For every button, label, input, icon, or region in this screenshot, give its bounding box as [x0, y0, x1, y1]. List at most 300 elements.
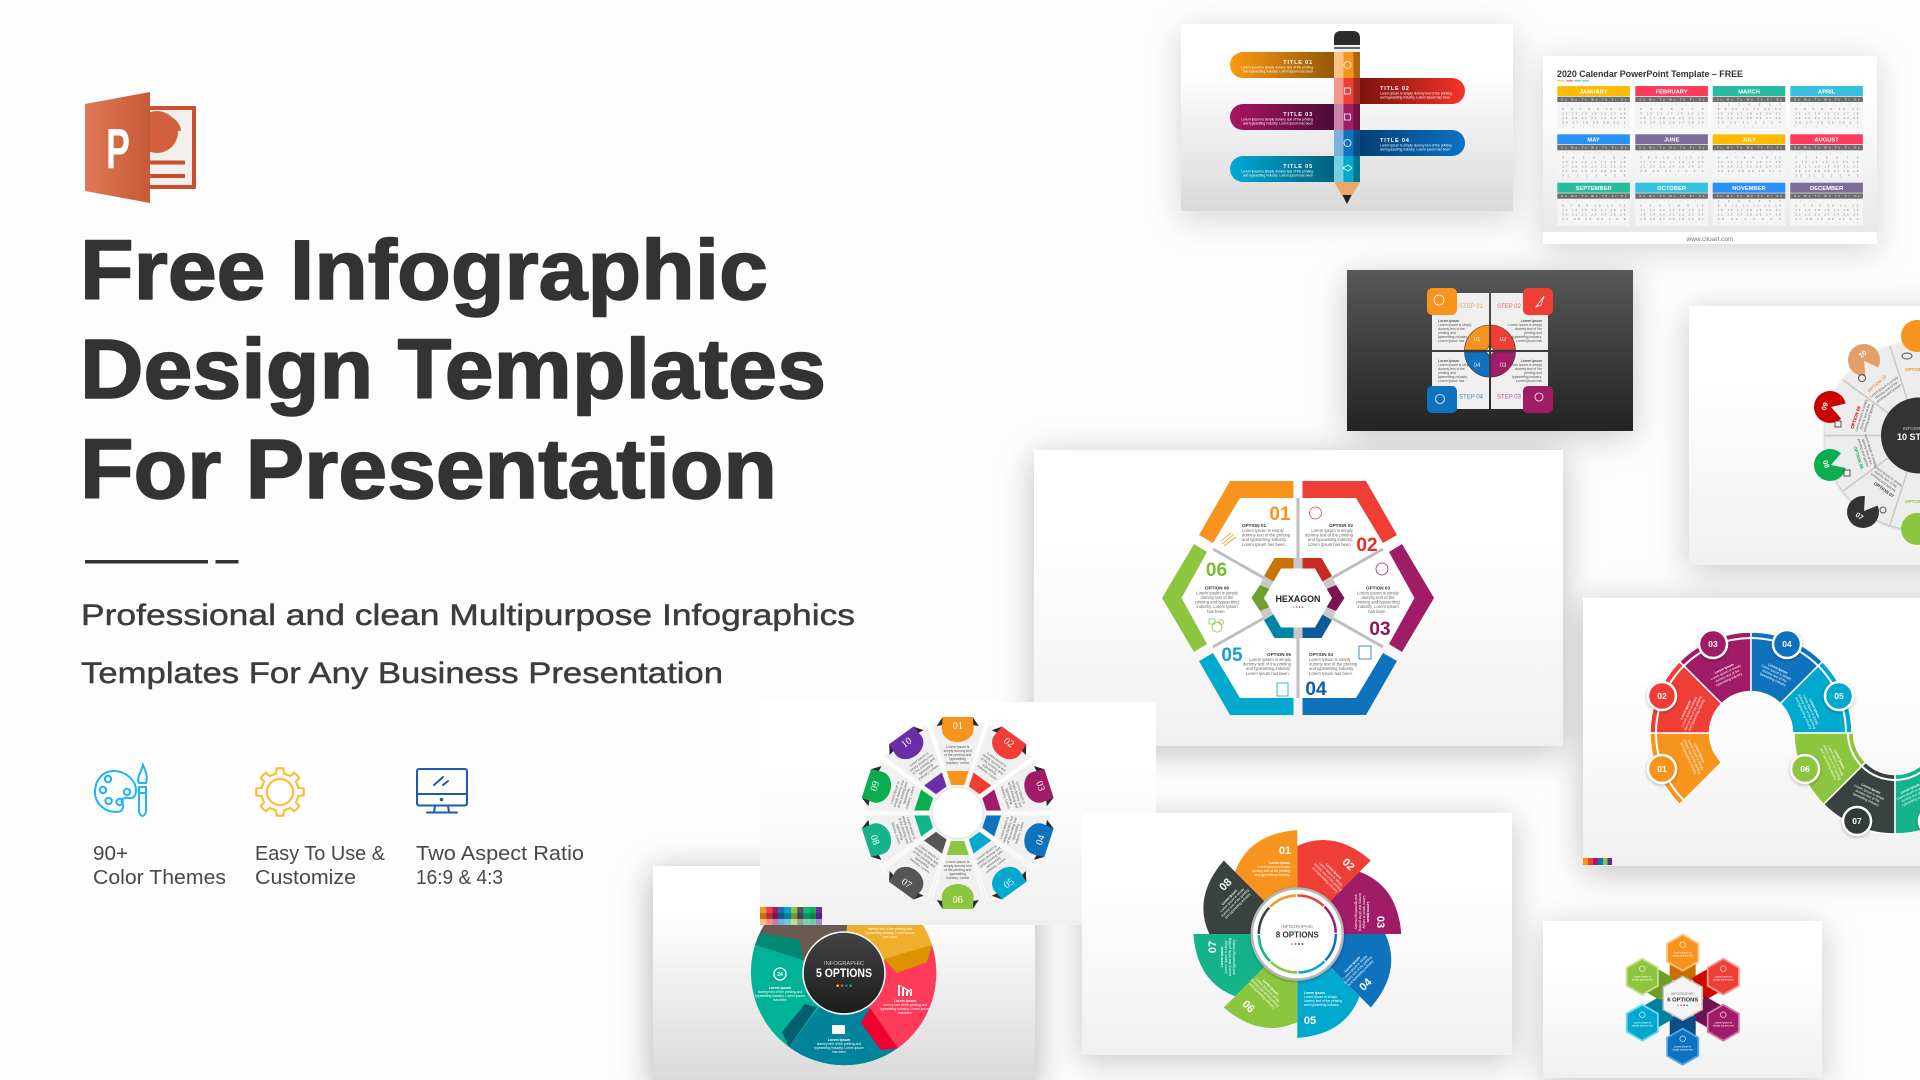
sector: brown [755, 880, 850, 973]
badge numbers: 02 [1657, 691, 1667, 701]
petal text: Lorem Ipsum is simply [1255, 977, 1281, 1003]
step text: printing and [1438, 331, 1456, 335]
month: May [1557, 134, 1630, 177]
badge numbers: 03 [1708, 639, 1718, 649]
subtitle: Professional and clean Multipurpose Infographics [81, 599, 855, 632]
label: easy to use and customize: Easy To Use & [255, 843, 386, 865]
title: Design Templates [80, 322, 826, 416]
sector text: simply dummy text [1010, 780, 1023, 808]
month: January: 5 6 7 8 9 10 11 [1562, 107, 1626, 111]
step labels [1459, 304, 1522, 400]
sector text: Lorem Ipsum is [946, 745, 970, 749]
option 03: Lorem Ipsum is simply [1357, 590, 1400, 596]
month: February: 9 10 11 12 13 14 15 [1640, 112, 1704, 116]
month: October: 1 2 3 4 5 6 7 [1640, 222, 1704, 226]
outer tabs [861, 717, 1054, 909]
wheel hub [932, 788, 983, 838]
pill: title 05: TITLE 05 [1283, 164, 1313, 170]
petals [1179, 816, 1416, 1052]
month: October: 18 19 20 21 22 23 24 [1640, 213, 1704, 217]
sector description lines: Lorem Ipsum is simply [1873, 464, 1903, 488]
petal text: Lorem Ipsum [1304, 991, 1325, 995]
month: July: 2 3 4 5 6 7 8 [1718, 173, 1781, 177]
month: January: 2 3 4 5 6 7 8 [1562, 125, 1626, 129]
petal text: dummy text of the printing [1252, 869, 1290, 873]
sector: pink [844, 945, 936, 1048]
label: 90+ color themes [93, 843, 226, 889]
badge numbers [1657, 639, 1862, 826]
wave inner rings [1656, 638, 1920, 800]
step tab 09: 09 [1821, 402, 1830, 411]
option 02: and typesetting industry. [1308, 537, 1353, 542]
sector text: pink: has been [898, 1011, 912, 1015]
sector text: typesetting [1005, 788, 1014, 805]
sector description lines: printing and typeset [1876, 383, 1902, 404]
sector: blue teal [789, 973, 898, 1065]
option labels: OPTION 09 [1850, 405, 1862, 429]
wave segment text: and typesetting industry [1679, 741, 1698, 775]
sector description lines: Lorem Ipsum is simply [1864, 434, 1878, 467]
option 03: OPTION 03 [1366, 586, 1390, 590]
sector text: Lorem Ipsum is [946, 860, 970, 864]
label: easy to use and customize [255, 843, 386, 889]
step text: Lorem Ipsum [1521, 319, 1542, 323]
sector text: teal: 24 [777, 972, 783, 978]
sector text: yellow: typesetting industry. Lorem Ipsum [865, 931, 915, 935]
step tab 07 [1847, 490, 1884, 528]
petal numbers: 06 [1240, 998, 1257, 1015]
pill: title 02: and typesetting industry. Lorem Ipsum has been [1380, 96, 1450, 100]
wave segment text: dummy text of the printing [1683, 695, 1703, 731]
petal numbers: 02 [1340, 856, 1357, 873]
step text: dummy text of the [1515, 327, 1542, 331]
option 02: OPTION 02 [1329, 523, 1353, 528]
step labels: STEP 04 [1459, 394, 1484, 400]
option 04: OPTION 04 [1309, 652, 1333, 657]
step labels: STEP 03 [1497, 394, 1522, 400]
month: February: 1 2 3 4 5 6 7 [1640, 125, 1704, 129]
panel: 6 options hexagons [1543, 921, 1822, 1078]
wheel base [1825, 342, 1920, 530]
hexagon: lower left cyan: Lorem Ipsum is [1634, 1022, 1652, 1025]
pill: title 04: Lorem Ipsum is simply dummy text of the printing [1380, 144, 1452, 148]
step text: Lorem Ipsum is simply [1438, 323, 1472, 327]
petal text: and typesetting industry. [1224, 892, 1252, 920]
step text: printing and [1438, 371, 1456, 375]
badge numbers: 04 [1782, 639, 1792, 649]
pill: title 03 [1230, 104, 1334, 130]
sector text: typesetting [895, 823, 904, 840]
icon: PowerPoint logo [85, 92, 196, 203]
icon: PowerPoint logo: P [106, 117, 130, 181]
month: March: 15 16 17 18 19 20 21 [1718, 112, 1781, 116]
month: June: 7 8 9 10 11 12 13 [1640, 155, 1704, 159]
hexagon: upper left green: simply dummy text [1632, 979, 1653, 982]
month: November: NOVEMBER [1732, 186, 1767, 192]
month: October: Su Mo Tu We Th Fr Sa [1639, 194, 1705, 198]
label: easy to use and customize: Customize [255, 867, 356, 889]
tab numbers: 01 [953, 721, 963, 732]
hexagon ring joints [1260, 558, 1336, 638]
month: September: 20 21 22 23 24 25 26 [1562, 213, 1626, 217]
sector text: typesetting [1011, 823, 1020, 840]
option 06: industry. Lorem Ipsum [1196, 604, 1238, 609]
panel: 2020 calendar [1543, 56, 1877, 244]
month: February: 23 24 25 26 27 28 29 [1640, 120, 1704, 124]
sector text: industry. Lorem [905, 786, 916, 809]
month: July [1713, 134, 1785, 177]
month: January: JANUARY [1580, 89, 1608, 95]
sector text: pink: dummy text of the printing and [883, 1003, 927, 1007]
sector text: blue teal: Lorem Ipsum [828, 1038, 850, 1042]
month: August: 9 10 11 12 13 14 15 [1795, 160, 1859, 164]
panel: 8 options circle [1082, 813, 1512, 1055]
step text: typesetting industry. [1512, 375, 1542, 379]
option 05: dummy text of the printing [1243, 662, 1292, 667]
wave segment text: Lorem Ipsum [1679, 700, 1692, 720]
month: November: Su Mo Tu We Th Fr Sa [1717, 194, 1782, 198]
month: October: OCTOBER [1657, 186, 1687, 192]
month: March: MARCH [1738, 89, 1760, 95]
month: November: 15 16 17 18 19 20 21 [1718, 208, 1781, 212]
wave segment text: Lorem Ipsum is simply [1802, 694, 1820, 726]
pill: title 03: and typesetting industry. Lorem Ipsum has been [1243, 122, 1313, 126]
month: August: 30 31 1 2 3 4 5 [1795, 173, 1859, 177]
month: September [1557, 183, 1630, 226]
panel: semicircle wave steps [1583, 598, 1920, 866]
icon: monitor [417, 769, 467, 812]
option 02: dummy text of the printing [1305, 533, 1354, 538]
month: April: 5 6 7 8 9 10 11 [1795, 107, 1859, 111]
leaf numbers: 02 [1500, 337, 1507, 343]
option 05: Lorem Ipsum has been . [1246, 671, 1291, 676]
option 05: and typesetting industry. [1246, 666, 1291, 671]
sector text: simply dummy text [976, 846, 1001, 866]
panel: 10 steps wheel [1689, 306, 1920, 565]
tab numbers: 06 [953, 895, 963, 906]
month: August [1790, 134, 1863, 177]
wave segment text: Lorem Ipsum [1714, 662, 1734, 675]
panel: hexagon [1034, 450, 1563, 746]
panel: four steps dark [1347, 270, 1633, 431]
option 01: Lorem Ipsum is simply [1242, 528, 1285, 533]
feature: color themes [93, 765, 226, 889]
hexagon: top orange [1667, 935, 1698, 971]
sector text: pink [880, 984, 930, 1015]
wave segment text: and typesetting industry [1819, 747, 1838, 781]
hexagon outer segments [1162, 481, 1434, 715]
month: May: 31 1 2 3 4 5 6 [1562, 173, 1626, 177]
month: June: 5 6 7 8 9 10 11 [1640, 173, 1704, 177]
option 04: Lorem Ipsum is simply [1309, 657, 1352, 662]
center color ring [1243, 880, 1352, 988]
hexagon white interior [1182, 498, 1414, 698]
icon: gear [256, 768, 304, 816]
sector text: simply dummy text [909, 753, 934, 773]
wave segment text: typesetting industry [1852, 792, 1880, 807]
sector text: industry. Lorem [946, 761, 969, 765]
option 01: Lorem Ipsum has been . [1242, 542, 1287, 547]
sector text: yellow: dummy text of the printing and [868, 927, 912, 931]
option labels [1850, 367, 1920, 504]
option labels: OPTION 07 [1873, 481, 1895, 499]
month: April: 3 4 5 6 7 8 9 [1795, 125, 1859, 129]
month: February: Su Mo Tu We Th Fr Sa [1639, 97, 1705, 101]
petal text: dummy text of the printing [1358, 893, 1362, 931]
sector text: industry. Lorem [909, 857, 930, 874]
option 06: OPTION 06 [1205, 586, 1229, 590]
option 04: 04 [1305, 679, 1327, 700]
sector description lines: Lorem Ipsum is simply [1869, 375, 1899, 398]
pill: title 01: and typesetting industry. Lorem Ipsum has been [1243, 70, 1313, 74]
step text: Lorem Ipsum is simply [1508, 323, 1542, 327]
petal numbers: 04 [1357, 976, 1375, 993]
month: April: Su Mo Tu We Th Fr Sa [1794, 97, 1860, 101]
petal text: and typesetting industry. [1354, 894, 1358, 930]
wave segment text: and typesetting industry [1794, 696, 1813, 730]
pill: title 03: TITLE 03 [1283, 112, 1313, 118]
month: July: JULY [1742, 138, 1756, 144]
step text: dummy text of the [1438, 367, 1465, 371]
option 03: industry. Lorem Ipsum [1357, 604, 1399, 609]
wave segment text: Lorem Ipsum is simply [1854, 784, 1885, 801]
option 04 [1305, 652, 1358, 700]
hexagon: right red: Lorem Ipsum is [1715, 976, 1733, 979]
title [80, 223, 826, 516]
petal text [1215, 857, 1376, 1011]
month: October: 27 28 29 30 1 2 3 [1640, 199, 1704, 203]
wave segment text: Lorem Ipsum [1768, 662, 1788, 675]
sector text: typesetting [914, 856, 930, 869]
petal text: Lorem Ipsum is simply [1224, 940, 1228, 973]
pill: title 05: Lorem Ipsum is simply dummy text of the printing [1241, 170, 1313, 174]
sector description lines: dummy text of the [1874, 470, 1898, 489]
step text: Lorem Ipsum has [1438, 379, 1464, 383]
hexagon: lower left cyan: simply dummy text [1632, 1025, 1653, 1028]
petal numbers: 05 [1304, 1015, 1316, 1027]
sector text: industry. Lorem [1000, 786, 1011, 809]
pill: title 04 [1360, 130, 1465, 156]
month: May: 3 4 5 6 7 8 9 [1562, 155, 1626, 159]
option 06 [1195, 560, 1239, 614]
panel: 5 options circle [653, 866, 1035, 1080]
connector bars [1640, 956, 1726, 1040]
petal text: dummy text of the printing [1228, 938, 1232, 976]
pill: title 04: TITLE 04 [1380, 138, 1410, 144]
sector text: of the printing and [944, 753, 971, 757]
month: September: 6 7 8 9 10 11 12 [1562, 204, 1626, 208]
option 05: OPTION 05 [1267, 652, 1291, 657]
petal text: Lorem Ipsum is simply [1257, 865, 1290, 869]
sector text: simply dummy text [982, 753, 1007, 773]
sector description lines: dummy text of the [1859, 403, 1871, 430]
pill: title 05 [1230, 156, 1334, 182]
sector description lines [1854, 375, 1904, 494]
month: September: 4 5 6 7 8 9 10 [1562, 222, 1626, 226]
month: June [1635, 134, 1708, 177]
sector text: blue teal [814, 1025, 864, 1054]
sector description lines: printing and typeset [1862, 403, 1875, 433]
badge numbers: 06 [1800, 764, 1810, 774]
step text: printing and [1524, 331, 1542, 335]
option 02 [1305, 523, 1378, 556]
petal text: and typesetting industry. [1254, 873, 1290, 877]
center circle: INFOGRAPHIC [824, 961, 864, 967]
wave segment text [1676, 660, 1920, 808]
hexagon: bottom blue [1667, 1029, 1698, 1065]
step text: Lorem Ipsum [1438, 359, 1459, 363]
option 04: dummy text of the printing [1309, 662, 1358, 667]
sector text: industry. Lorem [985, 857, 1007, 874]
panel shadows [653, 32, 1920, 1080]
month: December: 3 4 5 6 7 8 9 [1795, 222, 1859, 226]
month: February: 16 17 18 19 20 21 22 [1640, 116, 1704, 120]
sector text: simply dummy text [944, 749, 972, 753]
pill: title 01: TITLE 01 [1283, 60, 1313, 66]
wave segment text: Lorem Ipsum [1693, 743, 1706, 763]
petal text: dummy text of the printing [1250, 978, 1280, 1008]
tab numbers: 03 [1033, 780, 1047, 793]
month: January: Su Mo Tu We Th Fr Sa [1561, 97, 1627, 101]
step text: dummy text of the [1438, 327, 1465, 331]
sector text: teal: has been [773, 998, 787, 1002]
petal text: Lorem Ipsum is simply [1362, 896, 1366, 929]
hexagon: lower right purple: Lorem Ipsum is [1715, 1022, 1733, 1025]
hexagon: right red: simply dummy text [1713, 979, 1734, 982]
hexagon: bottom blue: Lorem Ipsum is [1674, 1046, 1692, 1049]
pill: title 02: Lorem Ipsum is simply dummy text of the printing [1380, 92, 1452, 96]
center hexagon [1663, 976, 1702, 1020]
month: March: 29 30 31 1 2 3 4 [1718, 120, 1781, 124]
month: August: 23 24 25 26 27 28 29 [1795, 169, 1859, 173]
option 02: 02 [1356, 535, 1378, 556]
wave segment text: Lorem Ipsum is simply [1710, 663, 1742, 681]
step text [1438, 319, 1542, 383]
month: November: 6 7 8 9 10 11 12 [1718, 222, 1781, 226]
month: May: 26 27 28 29 30 1 2 [1562, 151, 1626, 155]
petal text: Lorem Ipsum [1269, 861, 1290, 865]
hexagon center: HEXAGON [1276, 594, 1321, 605]
month: January: 12 13 14 15 16 17 18 [1562, 112, 1626, 116]
month: June: 31 1 2 3 4 5 6 [1640, 151, 1704, 155]
month: March: 8 9 10 11 12 13 14 [1718, 107, 1781, 111]
sector text: typesetting [986, 856, 1001, 869]
wave segment text: Lorem Ipsum is simply [1761, 664, 1792, 681]
icon: palette and brush [95, 765, 147, 816]
month: November: 1 2 3 4 5 6 7 [1718, 199, 1781, 203]
month: September: 13 14 15 16 17 18 19 [1562, 208, 1626, 212]
step tab 08 [1814, 448, 1852, 481]
month: August: 16 17 18 19 20 21 22 [1795, 164, 1859, 168]
pill: title 03: Lorem Ipsum is simply dummy text of the printing [1241, 118, 1313, 122]
month: April: 19 20 21 22 23 24 25 [1795, 116, 1859, 120]
sector text: industry. Lorem [918, 764, 939, 781]
option 06: has been . [1207, 609, 1227, 614]
hexagon: top orange: simply dummy text [1672, 955, 1693, 958]
leaf numbers: 04 [1474, 363, 1481, 369]
month: March: 5 6 7 8 9 10 11 [1718, 125, 1781, 129]
month: February: 26 27 28 29 30 31 1 [1640, 102, 1704, 106]
sector text: simply dummy text [944, 864, 972, 868]
step tab 09 [1814, 391, 1852, 423]
month: April: APRIL [1818, 89, 1836, 95]
sector text: industry. Lorem [890, 821, 901, 845]
petal text: dummy text of the printing [1343, 955, 1373, 985]
wave segment text: and typesetting industry [1687, 698, 1706, 732]
sector icons [1835, 353, 1912, 513]
petal text: Lorem Ipsum [1366, 902, 1370, 922]
tab corner folds [860, 717, 1055, 909]
option 01: dummy text of the printing [1242, 533, 1291, 538]
step text: typesetting industry. [1438, 375, 1468, 379]
wave segment text: typesetting industry [1715, 672, 1743, 687]
sector text: simply dummy text [892, 780, 905, 808]
leaf numbers: 01 [1474, 337, 1481, 343]
center text [1897, 426, 1920, 442]
hexagon inner ring [1252, 558, 1344, 638]
step tab 01 [1901, 320, 1920, 352]
pill: title 01 [1230, 52, 1334, 78]
step text: typesetting industry. [1438, 335, 1468, 339]
pill: title 01: Lorem Ipsum is simply dummy text of the printing [1241, 66, 1313, 70]
petal text: Lorem Ipsum [1344, 956, 1361, 973]
month: August: AUGUST [1814, 138, 1839, 144]
pill: title 04: and typesetting industry. Lorem Ipsum has been [1380, 148, 1450, 152]
step text: Lorem Ipsum [1438, 319, 1459, 323]
sector text: simply dummy text [1002, 815, 1014, 843]
hexagon: lower right purple [1708, 1005, 1739, 1041]
wave segment text: dummy text of the [1715, 668, 1740, 683]
step text: typesetting industry. [1512, 335, 1542, 339]
label: two aspect ratio: Two Aspect Ratio [416, 843, 584, 865]
month: May: Su Mo Tu We Th Fr Sa [1561, 146, 1627, 150]
pill: title 05: and typesetting industry. Lorem Ipsum has been [1243, 174, 1313, 178]
center disc [1252, 888, 1343, 980]
hexagon: upper left green: Lorem Ipsum is [1634, 976, 1652, 979]
option 04: and typesetting industry. [1309, 666, 1354, 671]
sector description lines: dummy text of the [1874, 381, 1899, 400]
color swatch [1583, 858, 1612, 865]
calendar heading: 2020 Calendar PowerPoint Template – FREE [1557, 69, 1743, 79]
petal text: dummy text of the printing [1220, 888, 1250, 918]
month: November: 8 9 10 11 12 13 14 [1718, 204, 1781, 208]
option 06: printing and typesetting [1195, 600, 1239, 605]
label: 90+ color themes: 90+ [93, 843, 128, 865]
month: September: Su Mo Tu We Th Fr Sa [1561, 194, 1627, 198]
month: July: Su Mo Tu We Th Fr Sa [1717, 146, 1782, 150]
tab numbers: 07 [899, 876, 914, 891]
month: May: MAY [1587, 138, 1600, 144]
option labels: OPTION 08 [1852, 446, 1865, 470]
month: April: 26 27 28 29 30 1 2 [1795, 120, 1859, 124]
sector text: teal: dummy text of the printing and [758, 990, 802, 994]
option 02: Lorem Ipsum has been . [1308, 542, 1353, 547]
step tab 10 [1848, 344, 1884, 383]
option 01: OPTION 01 [1242, 523, 1266, 528]
petal text: and typesetting industry. [1304, 1003, 1340, 1007]
sector text: simply dummy text [914, 846, 939, 866]
month: February [1635, 86, 1708, 129]
month: August: 2 3 4 5 6 7 8 [1795, 155, 1859, 159]
center circle [1881, 398, 1920, 474]
center circle: 5 OPTIONS [816, 968, 872, 980]
step squares [1432, 293, 1548, 409]
step labels: STEP 01 [1459, 304, 1484, 310]
step text: Lorem Ipsum has [1516, 339, 1542, 343]
month: October [1635, 183, 1708, 226]
sector text [889, 745, 1027, 880]
month: June: 28 29 30 1 2 3 4 [1640, 169, 1704, 173]
